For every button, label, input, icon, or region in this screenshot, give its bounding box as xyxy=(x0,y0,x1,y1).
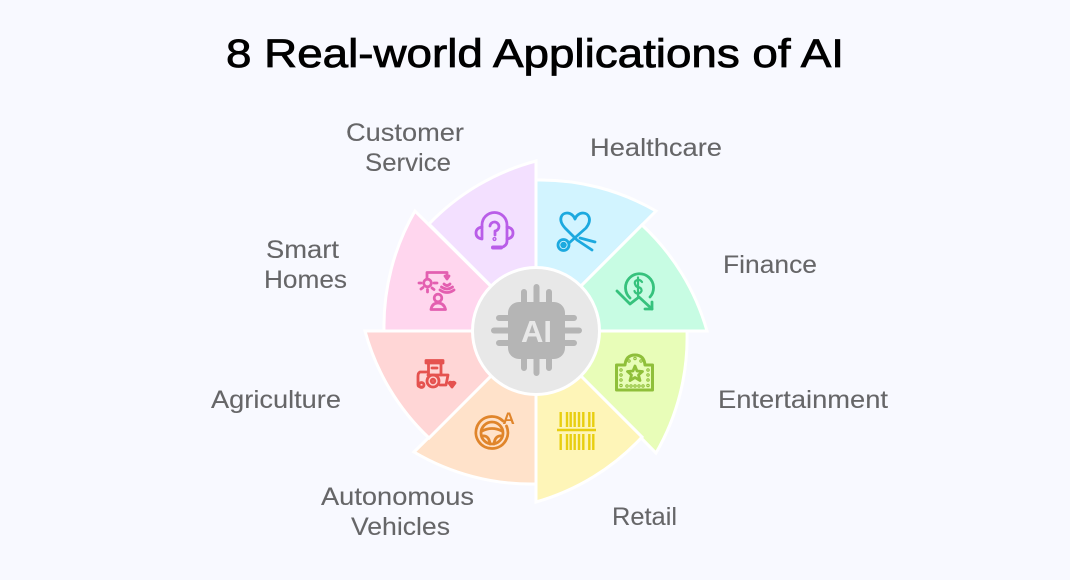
label: entertainment: Entertainment xyxy=(718,386,888,414)
icon: AI chip xyxy=(494,287,579,373)
icon: barcode xyxy=(557,412,596,450)
label: autonomous vehicles: Autonomous xyxy=(321,483,474,511)
icon: steering wheel with letter A: A xyxy=(502,409,515,428)
chip pins xyxy=(494,287,579,373)
label: healthcare: Healthcare xyxy=(590,134,722,162)
sector: finance xyxy=(536,225,707,331)
sector: autonomous vehicles xyxy=(414,331,536,484)
sector: healthcare xyxy=(536,180,656,331)
label: customer service: Service xyxy=(365,149,451,177)
icon: heart stethoscope xyxy=(558,213,595,250)
label: autonomous vehicles: Vehicles xyxy=(351,513,450,541)
title: 8 Real-world Applications of AI xyxy=(226,32,844,76)
center hub circle xyxy=(472,268,600,394)
sector: retail xyxy=(536,331,642,502)
label: smart homes: Homes xyxy=(264,266,347,294)
sector: smart homes xyxy=(384,211,536,331)
sector: agriculture xyxy=(365,331,536,438)
label: customer service: Customer xyxy=(346,119,464,147)
icon: headset with question mark xyxy=(476,212,513,248)
chip body xyxy=(508,302,565,359)
wheel of eight sectors xyxy=(365,161,707,502)
label: retail: Retail xyxy=(612,503,677,531)
icon: marquee sign with star xyxy=(616,355,652,390)
icon: tractor with heart xyxy=(418,360,455,388)
sector: customer service xyxy=(429,161,536,331)
icon: steering wheel with letter A xyxy=(476,409,515,449)
label: finance: Finance xyxy=(723,251,817,279)
icon: dollar coin with falling arrow xyxy=(617,274,654,309)
chip label: AI xyxy=(521,314,552,349)
label: smart homes: Smart xyxy=(266,236,339,264)
sector: entertainment xyxy=(536,331,687,453)
label: agriculture: Agriculture xyxy=(211,386,341,414)
icon: smart home light, wifi and person xyxy=(419,272,454,310)
